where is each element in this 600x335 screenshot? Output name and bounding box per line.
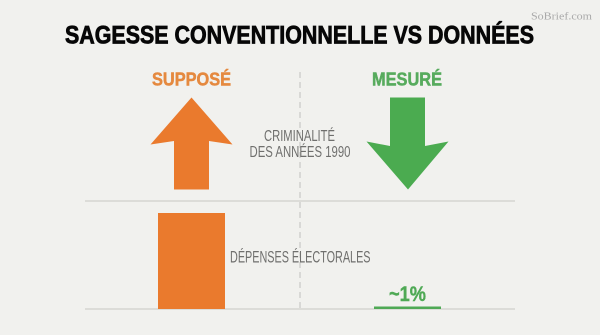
heading: mesuré: MESURÉ — [372, 68, 442, 90]
label: criminalité des années 1990 — [250, 126, 351, 161]
icon: orange up arrow — [150, 98, 232, 190]
label: criminalité des années 1990: DES ANNÉES 1990 — [250, 142, 351, 161]
heading: supposé: SUPPOSÉ — [152, 68, 231, 90]
value: about one percent: ~1% — [389, 283, 426, 306]
title: SAGESSE CONVENTIONNELLE VS DONNÉES — [65, 20, 534, 50]
icon: green down arrow — [366, 98, 448, 190]
label: dépenses électorales: DÉPENSES ÉLECTORALES — [230, 248, 370, 266]
bar: green measured spending — [374, 306, 441, 309]
label: criminalité des années 1990: CRIMINALITÉ — [264, 126, 335, 145]
watermark: SoBrief.com — [531, 12, 592, 22]
bar: orange supposed spending — [158, 213, 225, 309]
